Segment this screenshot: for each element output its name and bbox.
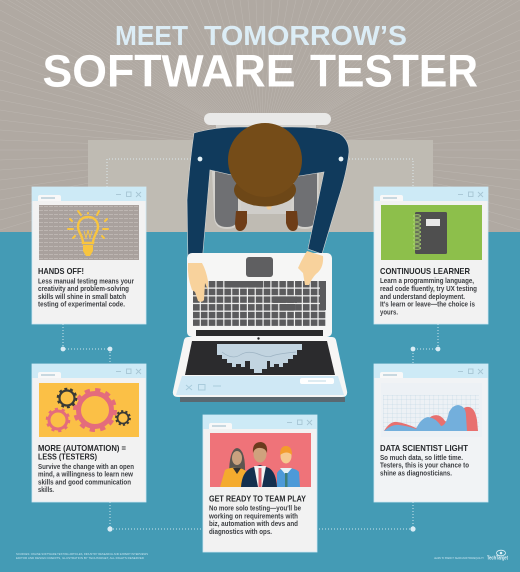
- footer credits: [16, 552, 148, 560]
- left hand: [188, 263, 208, 302]
- text: No more solo testing—you'll be: [209, 506, 301, 513]
- jacket and arms: [187, 127, 349, 263]
- text: DATA SCIENTIST LIGHT: [380, 443, 469, 453]
- panel: hands off: [32, 187, 146, 324]
- text: mind, a willingness to learn new: [38, 472, 133, 479]
- publisher logo and link: TechTarget: [487, 556, 508, 562]
- image: three colleagues: [210, 433, 311, 487]
- text: skills and good communication: [38, 479, 131, 486]
- text: yours.: [380, 310, 398, 316]
- title: TESTER: [310, 46, 478, 96]
- text: [380, 266, 477, 316]
- window title bar: [32, 187, 146, 201]
- text: testing of experimental code.: [38, 302, 125, 309]
- centre man: [241, 442, 277, 487]
- publisher logo and link: LEARN TO PREDICT: SEARCHSOFTWAREQUALITY: [434, 556, 484, 560]
- image: area chart: [381, 383, 482, 437]
- laptop screen: [173, 337, 347, 402]
- window title bar: [32, 364, 146, 378]
- text: [208, 494, 306, 536]
- text: Testers, this is your chance to: [380, 463, 469, 470]
- text: biz, automation with devs and: [209, 521, 298, 528]
- window icons on screen bar: [186, 384, 221, 390]
- text: diagnostics with ops.: [209, 529, 272, 536]
- text: working on requirements with: [208, 514, 298, 520]
- right hand: [298, 251, 323, 285]
- floor rug: [88, 140, 433, 232]
- text: [380, 443, 469, 478]
- panel: more automation: [32, 364, 146, 502]
- shoulder nodes: [198, 157, 343, 161]
- text: Less manual testing means your: [38, 278, 134, 285]
- image: light bulb: [39, 205, 139, 260]
- text: LESS (TESTERS): [38, 452, 97, 462]
- text: skills will shine in small batch: [38, 294, 126, 301]
- panel: data scientist light: [374, 364, 488, 502]
- image: notebook: [381, 205, 482, 260]
- panel: team play: [203, 415, 317, 552]
- text: CONTINUOUS LEARNER: [380, 266, 470, 276]
- right man: [277, 446, 300, 487]
- title: SOFTWARE: [42, 46, 296, 96]
- window title bar: [374, 187, 488, 201]
- text: Learn a programming language,: [380, 278, 474, 285]
- title: [42, 20, 478, 96]
- chair: [204, 113, 331, 130]
- text: shine as diagnosticians.: [380, 470, 452, 478]
- title: TOMORROW’S: [204, 20, 407, 51]
- text: [38, 443, 134, 494]
- text: HANDS OFF!: [38, 266, 84, 276]
- head: [228, 123, 302, 210]
- text: So much data, so little time.: [380, 455, 463, 462]
- text: Survive the change with an open: [38, 464, 134, 471]
- connector nodes: [61, 347, 440, 532]
- screen graphic: [217, 344, 302, 373]
- dotted connector lines: [63, 159, 438, 529]
- text: [38, 266, 134, 309]
- panel: continuous learner: [374, 187, 488, 324]
- window title bar: [374, 364, 488, 378]
- title: MEET: [115, 20, 188, 51]
- text: skills.: [38, 487, 54, 494]
- footer credits: SOURCES: ONLINE SOFTWARE TESTING ARTICLES, INDUSTRY RESEARCH AND EXPERT INTERVIEWS: [16, 552, 148, 556]
- shoes: [235, 211, 298, 231]
- text: It's learn or leave—the choice is: [380, 302, 475, 309]
- publisher logo and link: [434, 550, 508, 562]
- text: GET READY TO TEAM PLAY: [209, 494, 306, 504]
- text: and understand deployment.: [380, 294, 465, 301]
- woman: [220, 448, 247, 487]
- seat and legs: [212, 170, 319, 229]
- laptop keyboard deck: [187, 253, 332, 337]
- window title bar: [203, 415, 317, 429]
- image: gears: [39, 383, 139, 437]
- illustration: tester at desk: [173, 113, 349, 402]
- footer credits: EDITOR AND DESIGN CREDITS, ILLUSTRATION BY TECHTARGET, ALL RIGHTS RESERVED: [16, 556, 144, 560]
- text: creativity and problem-solving: [38, 286, 129, 293]
- text: MORE (AUTOMATION) =: [38, 443, 126, 453]
- text: read code fluently, try UX testing: [380, 286, 477, 293]
